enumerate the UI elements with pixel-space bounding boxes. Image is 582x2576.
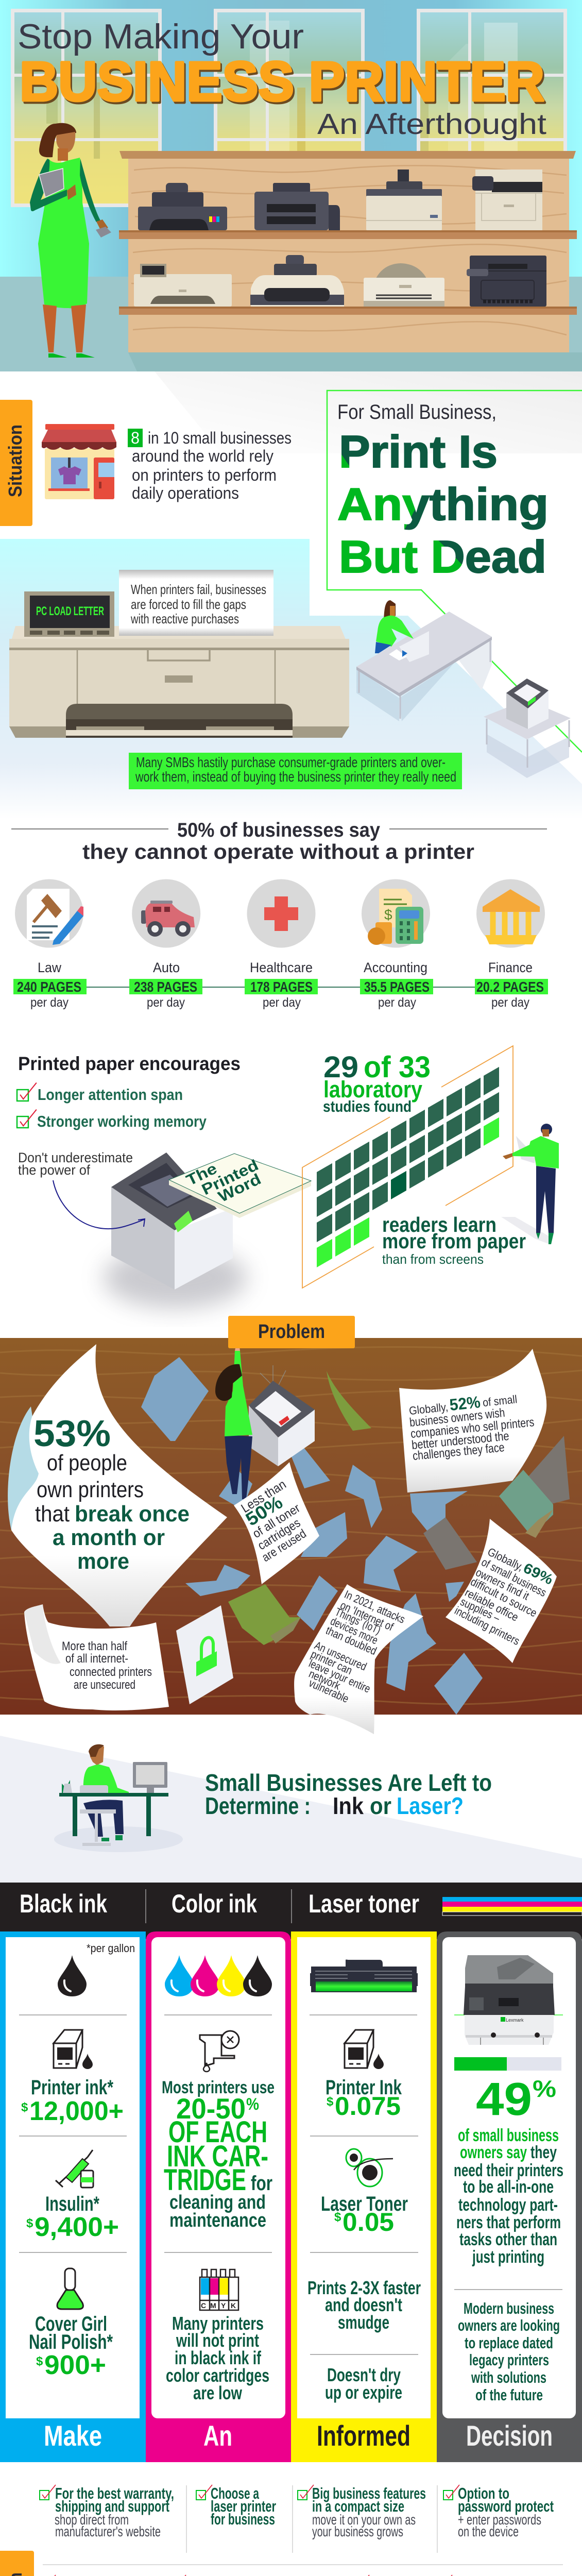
stat: 29 of 33 laboratory studies: 29 — [323, 1050, 358, 1084]
column: color ink: TRIDGE — [164, 2163, 246, 2197]
checklist row 1: For the best warranty, — [55, 2484, 174, 2502]
icon: toner cartridge — [310, 1960, 418, 1992]
icon: finance — [476, 879, 545, 948]
printed sheet: when printers fail — [119, 570, 273, 636]
column: laser toner: Doesn't dry — [327, 2364, 401, 2385]
column: color ink: Most printers use — [162, 2078, 275, 2097]
checklist row 1: for business — [211, 2510, 275, 2528]
printed sheet: when printers fail: with reactive purchases — [130, 611, 239, 626]
timeline: pages per day: 238 PAGES — [134, 979, 197, 995]
stack of paper — [169, 1154, 311, 1218]
paper: 69 percent: supplies – — [458, 1595, 502, 1624]
table header band — [0, 1883, 582, 1939]
checklist row 1: Option to — [458, 2484, 509, 2502]
timeline: pages per day: Healthcare — [250, 960, 313, 975]
icon: ink cartridge — [54, 2030, 93, 2069]
figure: man at desk — [59, 1744, 168, 1844]
icon: cmyk cartridges: M — [210, 2301, 216, 2310]
heading: ink or laser: Small Businesses Are Left to — [205, 1769, 492, 1796]
progress bar: 49 percent — [454, 2057, 561, 2071]
paper: less than 50 percent: are reused — [260, 1527, 309, 1565]
column: color ink: cleaning and — [169, 2192, 266, 2213]
column: decision: they — [530, 2143, 557, 2162]
stat: readers learn more from paper: readers learn — [382, 1213, 497, 1236]
paper: 52 percent: challenges they face — [412, 1440, 505, 1463]
timeline: pages per day: per day — [263, 995, 301, 1010]
paper: 69 percent: including printers — [453, 1604, 522, 1648]
panel: situation background — [0, 371, 582, 819]
column: laser toner: 0.05 — [343, 2208, 394, 2236]
paper: more than half: of all internet- — [65, 1652, 128, 1666]
paper: 69 percent — [446, 1519, 557, 1663]
stat: 8 in 10 small businesses: daily operations — [132, 484, 239, 502]
column: decision: with solutions — [471, 2368, 546, 2386]
title: Stop Making Your — [18, 17, 304, 56]
column: black ink: *per gallon — [87, 1942, 135, 1955]
paper: 69 percent: of small business — [480, 1555, 549, 1599]
column: laser toner: smudge — [338, 2312, 389, 2333]
wooden shelf unit — [119, 151, 577, 352]
timeline: pages per day: per day — [491, 995, 529, 1010]
callout: print is anything but dead: Anything — [337, 479, 549, 530]
text block: printed paper encourages — [17, 1053, 241, 1178]
paper: more than half: are unsecured — [74, 1678, 135, 1692]
column: color ink: % — [246, 2095, 259, 2113]
callout: print is anything but dead: But Dead — [339, 531, 546, 582]
callout: smb purchases — [129, 753, 462, 789]
paper: 69 percent: reliable office — [463, 1586, 521, 1624]
callout: print is anything but dead — [327, 391, 582, 752]
stack of paper: The — [184, 1160, 220, 1189]
checklist row 1: manufacturer's website — [55, 2523, 161, 2539]
heading: 50% of businesses — [11, 819, 547, 863]
timeline: pages per day: 35.5 PAGES — [364, 979, 430, 995]
callout: print is anything but dead: Print Is — [339, 426, 498, 477]
text block: printed paper encourages: Don't underestimate — [18, 1150, 133, 1165]
column: black ink: $ — [21, 2100, 28, 2114]
text block: printed paper encourages: Longer attention span — [38, 1086, 183, 1104]
heading: ink or laser: Ink — [333, 1792, 364, 1819]
paper: 53 percent: of people — [47, 1450, 127, 1476]
text block: printed paper encourages: Stronger working memory — [37, 1112, 207, 1130]
column: laser toner: $ — [327, 2095, 334, 2109]
paper: 52 percent: companies who sell printers — [410, 1415, 535, 1441]
icon: cmyk cartridges: K — [231, 2301, 236, 2310]
printer: black multifunction — [467, 256, 546, 307]
checklist row 1: in a compact size — [312, 2497, 404, 2515]
callout: smb purchases: Many SMBs hastily purchase consumer-grade printers and over- — [136, 754, 446, 770]
checklist row 2 — [40, 2565, 563, 2576]
paper: less than 50 percent — [234, 1462, 319, 1584]
title — [18, 17, 546, 141]
paper: 52 percent: business owners wish — [409, 1406, 506, 1430]
paper: 52 percent: of small — [482, 1393, 518, 1409]
paper: less than 50 percent: Less than — [238, 1477, 288, 1516]
icon: padlock on paper — [176, 1605, 233, 1704]
column: decision — [437, 1931, 582, 2462]
paper: 53 percent — [8, 1344, 227, 1626]
column: color ink: are low — [193, 2382, 243, 2403]
paper: less than 50 percent: 50% — [242, 1492, 286, 1530]
column: decision: just printing — [472, 2247, 544, 2267]
checklist row 1 — [40, 2484, 554, 2553]
heading: ink or laser — [205, 1769, 492, 1819]
checklist row 1: shipping and support — [55, 2497, 169, 2515]
column: color ink: in black ink if — [175, 2347, 262, 2368]
chart: 29 of 33 studies grid — [302, 1046, 513, 1288]
paper: IoT attacks: on 'Internet of — [338, 1599, 396, 1634]
figure: presenter — [501, 1124, 559, 1244]
section tab: situation — [0, 400, 32, 526]
stat: 29 of 33 laboratory studies: studies found — [323, 1097, 412, 1115]
column: color ink: for — [251, 2172, 272, 2195]
paper: IoT attacks: leave your entire — [307, 1657, 372, 1696]
column: color ink: 20-50 — [176, 2092, 246, 2125]
icon: cmyk cartridges: Y — [221, 2301, 226, 2310]
paper: IoT attacks: devices more — [329, 1615, 380, 1647]
paper: 69 percent: Globally, — [486, 1545, 525, 1573]
column: decision: % — [533, 2075, 556, 2102]
arrow: to the printer — [53, 1180, 145, 1229]
paper: IoT attacks: printer can — [309, 1648, 354, 1677]
checklist row 1: your business grows — [312, 2523, 403, 2539]
paper: 53 percent: own printers — [37, 1477, 144, 1502]
column: color ink: Many printers — [172, 2313, 264, 2334]
stat: 29 of 33 laboratory studies: laboratory — [323, 1076, 422, 1103]
column: black ink: Insulin* — [45, 2193, 99, 2215]
column: color ink — [146, 1931, 291, 2462]
paper: more than half: connected printers — [70, 1665, 152, 1679]
icon: healthcare — [247, 879, 315, 948]
column: color ink: will not print — [176, 2330, 259, 2351]
column: color ink: INK CAR- — [167, 2140, 268, 2173]
column: color ink: An — [203, 2419, 232, 2452]
column: laser toner: up or expire — [325, 2382, 402, 2403]
timeline: pages per day: Accounting — [364, 960, 427, 975]
column: decision: 49 — [476, 2074, 532, 2125]
paper: more than half: More than half — [62, 1639, 127, 1653]
panel: hero — [0, 0, 582, 371]
checklist row 1: Choose a — [211, 2484, 260, 2502]
section tab: problem — [228, 1316, 355, 1348]
printed sheet: when printers fail: are forced to fill the gaps — [131, 597, 246, 612]
paper: 69 percent: difficult to source — [469, 1575, 539, 1619]
checklist row 1: shop direct from — [55, 2512, 129, 2528]
stat: 8 in 10 small businesses: around the world rely — [132, 447, 273, 465]
printer: dome — [364, 263, 444, 307]
column: black ink: $ — [26, 2216, 33, 2230]
checklist row 1: on the device — [458, 2523, 519, 2539]
heading: ink or laser: or — [370, 1792, 391, 1819]
paper: 69 percent: owners find it — [474, 1566, 531, 1603]
column: decision: of the future — [475, 2386, 543, 2404]
icon: laser roller — [346, 2149, 393, 2187]
scattered blue papers — [141, 1357, 483, 1715]
stat: 29 of 33 laboratory studies: of 33 — [364, 1050, 431, 1084]
icon: law — [15, 879, 83, 948]
column: decision: owners say — [460, 2143, 527, 2162]
paper: 52 percent: 52% — [449, 1393, 481, 1414]
paper: more than half — [24, 1604, 169, 1710]
paper: IoT attacks: An unsecured — [313, 1639, 369, 1673]
figure: woman in green dress — [30, 123, 111, 358]
stat: readers learn more from paper — [382, 1213, 526, 1267]
timeline: pages per day — [13, 960, 548, 1010]
paper: 52 percent: Globally, — [408, 1400, 449, 1417]
product: lexmark printer — [464, 1955, 555, 2045]
printer: black inkjet — [138, 183, 227, 230]
column: laser toner — [291, 1931, 437, 2462]
scattered green and grey papers — [228, 1371, 570, 1645]
icon: cmyk cartridges: C — [201, 2301, 206, 2310]
paper: IoT attacks: Things' (IoT) — [333, 1605, 383, 1637]
timeline: pages per day: 20.2 PAGES — [476, 979, 544, 995]
column: laser toner: and doesn't — [325, 2294, 402, 2315]
paper: less than 50 percent: cartridges — [255, 1516, 303, 1553]
icon: cmyk drops — [165, 1955, 272, 1996]
column: laser toner: Laser Toner — [321, 2193, 408, 2215]
checklist row 1: Big business features — [312, 2484, 426, 2502]
title: BUSINESS PRINTER — [20, 50, 544, 112]
section tab: problem: Problem — [258, 1321, 325, 1343]
paper: 53 percent: that — [35, 1501, 70, 1527]
heading: ink or laser: Laser? — [397, 1792, 464, 1819]
timeline: pages per day: 240 PAGES — [17, 979, 81, 995]
column: black ink — [0, 1931, 146, 2462]
checklist row 1: + enter passwords — [458, 2512, 541, 2528]
timeline: pages per day: Auto — [153, 960, 180, 975]
icon: accounting: $ — [384, 907, 392, 923]
column: black ink: 900+ — [44, 2350, 106, 2380]
printer: cream and black inkjet — [250, 255, 344, 307]
column: black ink: Printer ink* — [31, 2076, 113, 2099]
panel: problem wood background — [0, 1338, 582, 1715]
column: laser toner: Printer Ink — [326, 2076, 402, 2099]
stat: 8 in 10 small businesses: on printers to perform — [132, 466, 277, 484]
section tab: solution — [0, 2551, 34, 2576]
callout: smb purchases: work them, instead of buying the business printer they really need — [135, 769, 456, 785]
printer display: pc load letter: PC LOAD LETTER — [36, 604, 104, 618]
paper: less than 50 percent: of all toner — [250, 1501, 303, 1541]
column: color ink: maintenance — [169, 2210, 266, 2231]
paper: 53 percent: 53% — [33, 1413, 111, 1454]
paper: 69 percent: 69% — [521, 1560, 556, 1588]
table header band: Black ink — [20, 1889, 107, 1918]
text block: printed paper encourages: the power of — [18, 1162, 90, 1178]
icon: cmyk cartridges — [200, 2269, 238, 2310]
icon: ink cartridge — [345, 2030, 384, 2069]
table header band: Color ink — [172, 1889, 257, 1918]
column: laser toner: Informed — [317, 2419, 410, 2452]
icon: black drop — [58, 1955, 87, 1996]
column: black ink: Cover Girl — [35, 2313, 107, 2335]
icon: auto — [132, 879, 200, 948]
timeline: pages per day: Finance — [488, 960, 533, 975]
column: laser toner: Prints 2-3X faster — [307, 2277, 421, 2298]
printer: cream with screen — [134, 264, 232, 307]
heading: ink or laser: Determine : — [205, 1792, 311, 1819]
stat: 8 in 10 small businesses: 8 — [131, 429, 140, 447]
illustration: large printer with error — [9, 626, 349, 738]
timeline: pages per day: per day — [30, 995, 69, 1010]
column: black ink: Make — [44, 2419, 102, 2452]
paper: IoT attacks: than doubled — [324, 1624, 379, 1657]
column: laser toner: 0.075 — [335, 2092, 401, 2121]
paper: 52 percent — [399, 1349, 546, 1493]
stack of paper: Printed — [199, 1157, 261, 1198]
icon: storefront — [42, 424, 116, 499]
stat: 29 of 33 laboratory studies — [323, 1050, 431, 1115]
printer: cream multifunction — [472, 170, 542, 230]
title: An Afterthought — [317, 108, 546, 141]
column: black ink: 9,400+ — [35, 2212, 119, 2242]
paper: IoT attacks — [294, 1584, 423, 1734]
timeline: pages per day: 178 PAGES — [250, 979, 313, 995]
figure: woman at broken printer — [215, 1343, 315, 1499]
heading: 50% of businesses: 50% of businesses say — [177, 819, 380, 841]
paper: 53 percent: break once — [75, 1501, 190, 1527]
printer: cream laser — [366, 170, 442, 230]
column: color ink: OF EACH — [168, 2115, 267, 2149]
column: color ink: color cartridges — [166, 2365, 269, 2386]
icon: syringe — [56, 2150, 93, 2188]
stat: 8 in 10 small businesses: in 10 small businesses — [148, 429, 292, 447]
paper: 53 percent: more — [77, 1549, 129, 1574]
icon: cartridge with x — [200, 2031, 239, 2072]
checklist row 1: laser printer — [211, 2497, 276, 2515]
column: decision: legacy printers — [469, 2351, 549, 2369]
printed sheet: when printers fail: When printers fail, businesses — [131, 582, 266, 597]
icon: accounting — [362, 879, 430, 948]
stack of paper: Word — [216, 1171, 264, 1206]
icon: nail polish — [57, 2268, 83, 2309]
paper: 52 percent: better understood the — [411, 1429, 510, 1452]
heading: 50% of businesses: they cannot operate without a printer — [82, 840, 474, 863]
table header band: Laser toner — [309, 1889, 419, 1918]
checklist row 1: move it on your own as — [312, 2512, 416, 2528]
paper: 53 percent: a month or — [53, 1525, 165, 1550]
timeline: pages per day: per day — [147, 995, 185, 1010]
timeline: pages per day: per day — [378, 995, 416, 1010]
section tab: situation: Situation — [5, 425, 26, 497]
column: black ink: 12,000+ — [29, 2096, 124, 2126]
callout: print is anything but dead: For Small Business, — [337, 401, 497, 423]
printer display: pc load letter — [24, 591, 114, 637]
column: black ink: Nail Polish* — [29, 2331, 113, 2353]
illustration: woman at desk with printer — [356, 600, 571, 778]
product: lexmark printer: Lexmark — [506, 2018, 524, 2023]
column: laser toner: $ — [334, 2210, 341, 2224]
stat: readers learn more from paper: than from screens — [382, 1251, 484, 1267]
text block: printed paper encourages: Printed paper encourages — [18, 1053, 241, 1074]
paper: IoT attacks: vulnerable — [307, 1676, 351, 1705]
column: black ink: $ — [36, 2354, 43, 2368]
illustration: printer with the printed word — [103, 1153, 311, 1309]
panel: ink or laser background — [0, 1736, 582, 1883]
stat: 8 in 10 small businesses — [128, 429, 292, 502]
windows — [11, 9, 567, 207]
paper: IoT attacks: network — [307, 1667, 343, 1692]
printer: dark office — [254, 183, 340, 230]
paper: IoT attacks: In 2021, attacks — [343, 1588, 407, 1626]
stat: readers learn more from paper: more from paper — [382, 1229, 526, 1253]
timeline: pages per day: Law — [38, 960, 61, 975]
